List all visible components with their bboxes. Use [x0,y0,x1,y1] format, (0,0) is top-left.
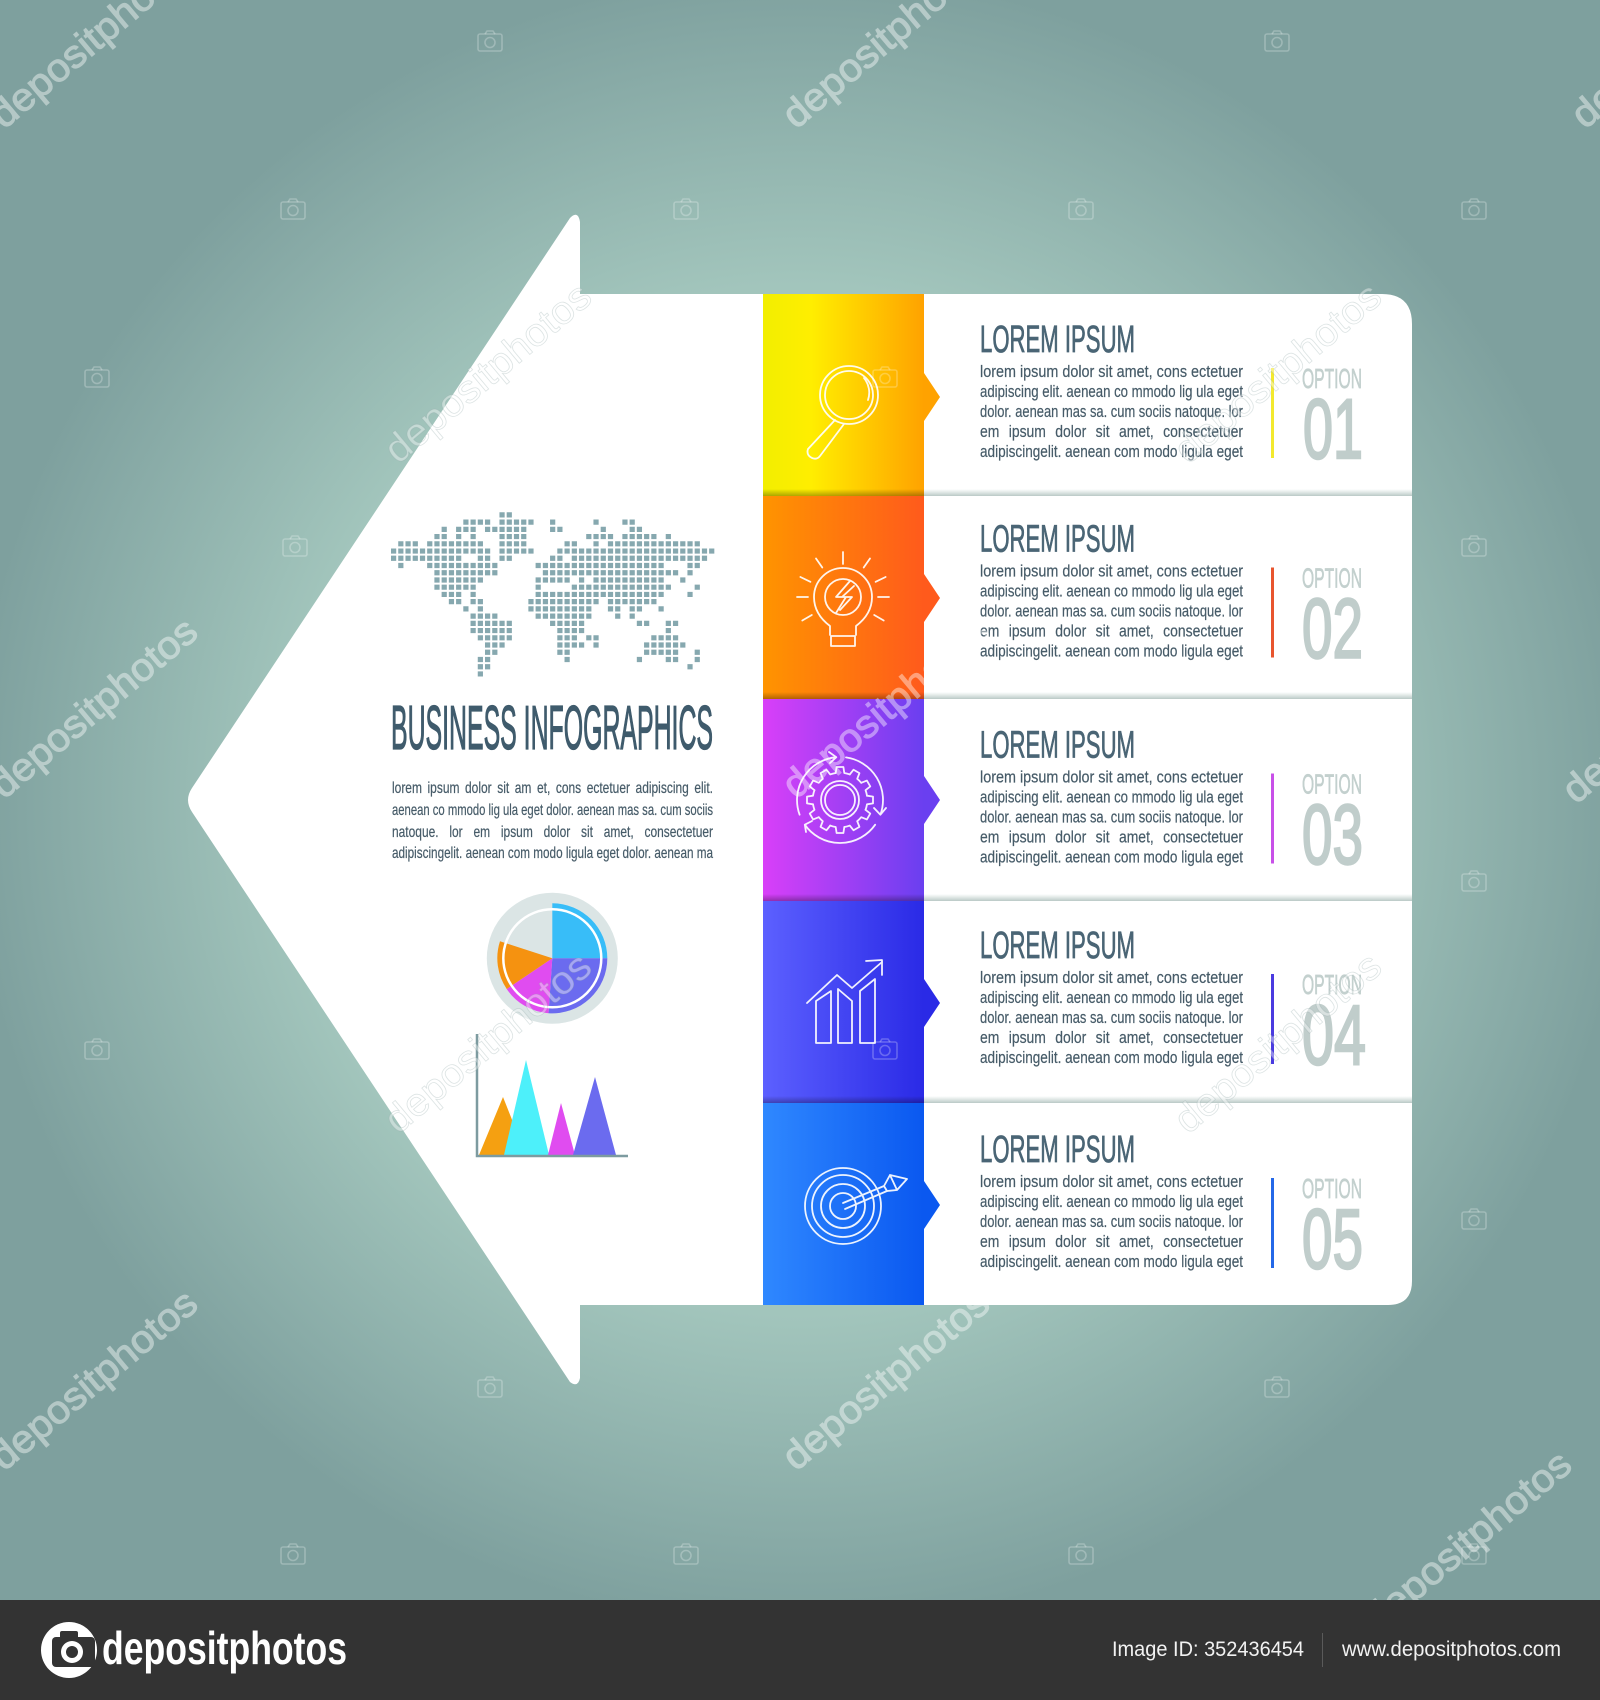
watermarks: depositphotos [376,944,600,1142]
watermarks: depositphotos [1166,944,1390,1142]
text 3: lorem ipsum dolor sit amet, cons ectetuer [980,768,1243,786]
pie chart [487,893,618,1024]
text 3: adipiscingelit. aenean com modo ligula eget [980,848,1243,866]
footer logo: depositphotos [102,1622,347,1674]
footer logo [41,1622,347,1678]
option label 4: OPTION [1302,969,1362,1000]
text 4: lorem ipsum dolor sit amet, cons ectetuer [980,969,1243,987]
option label 2: OPTION [1302,562,1362,594]
watermark camera marks [85,31,1486,1564]
watermarks: depositphotos [774,1281,998,1479]
heading 4: LOREM IPSUM [980,924,1135,966]
text 2: lorem ipsum dolor sit amet, cons ectetuer [980,562,1243,580]
intro paragraph: lorem ipsum dolor sit am et, cons ectetuer adipiscing elit. [392,780,713,797]
number 2: 02 [1302,582,1363,676]
white arrow panel [188,215,1412,1384]
number 5: 05 [1302,1192,1363,1286]
option label 5: OPTION [1302,1173,1362,1204]
accent line 5 [1271,1178,1274,1268]
text 3: em ipsum dolor sit amet, consectetuer [980,828,1243,846]
watermarks: depositphotos [774,609,998,807]
row dividers [924,489,1412,1103]
intro paragraph: aenean co mmodo lig ula eget dolor. aenean mas sa. cum sociis [392,802,713,819]
icon: light bulb [797,552,889,646]
heading 3: LOREM IPSUM [980,724,1135,766]
text 1 [980,363,1243,461]
text 1: dolor. aenean mas sa. cum sociis natoque. lor [980,403,1243,421]
number 4: 04 [1302,988,1366,1082]
text 4: dolor. aenean mas sa. cum sociis natoque. lor [980,1009,1243,1027]
text 2 [980,562,1243,660]
text 1: em ipsum dolor sit amet, consectetuer [980,423,1243,441]
area chart [477,1034,628,1156]
option 2 [980,518,1363,676]
option 1 [980,318,1363,476]
text 3 [980,768,1243,866]
option 5 [980,1128,1363,1286]
website url: www.depositphotos.com [1341,1638,1561,1661]
intro paragraph: natoque. lor em ipsum dolor sit amet, consectetuer [392,824,713,841]
text: BUSINESS INFOGRAPHICS [391,694,713,763]
text 5 [980,1173,1243,1271]
text 2: adipiscingelit. aenean com modo ligula eget [980,642,1243,660]
text 3: dolor. aenean mas sa. cum sociis natoque. lor [980,808,1243,826]
accent line 4 [1271,974,1274,1064]
text 5: em ipsum dolor sit amet, consectetuer [980,1233,1243,1251]
icon: rising bar chart [807,960,882,1043]
text 5: lorem ipsum dolor sit amet, cons ectetuer [980,1173,1243,1191]
accent line 2 [1271,568,1274,658]
band 4 indigo [763,901,940,1103]
text 4: adipiscingelit. aenean com modo ligula eget [980,1049,1243,1067]
text 3: adipiscing elit. aenean co mmodo lig ula eget [980,788,1243,806]
band 1 yellow [763,294,940,496]
text 1: adipiscing elit. aenean co mmodo lig ula eget [980,383,1243,401]
option 3 [980,724,1363,882]
text 2: dolor. aenean mas sa. cum sociis natoque. lor [980,602,1243,620]
icon: magnifier [808,366,878,459]
heading 2: LOREM IPSUM [980,518,1135,560]
option 4 [980,924,1366,1082]
intro paragraph [392,780,713,862]
text 1: lorem ipsum dolor sit amet, cons ectetuer [980,363,1243,381]
watermarks: depositphotos [1356,1442,1580,1640]
icon: target with arrow [805,1168,907,1244]
heading 5: LOREM IPSUM [980,1128,1135,1170]
band 5 blue [763,1103,940,1305]
heading 1: LOREM IPSUM [980,318,1135,360]
text 5: dolor. aenean mas sa. cum sociis natoque. lor [980,1213,1243,1231]
option label 3: OPTION [1302,768,1362,800]
intro paragraph: adipiscingelit. aenean com modo ligula eget dolor. aenean ma [392,845,713,862]
text 2: em ipsum dolor sit amet, consectetuer [980,622,1243,640]
icon: gear with arrows [797,752,886,843]
footer separator [1322,1633,1323,1667]
band 2 orange [763,496,940,699]
option label 1: OPTION [1302,363,1362,394]
accent line 3 [1271,774,1274,864]
image id: Image ID: 352436454 [1112,1638,1304,1661]
number 3: 03 [1302,788,1363,882]
watermarks: depositphotos [376,274,600,472]
text 4: em ipsum dolor sit amet, consectetuer [980,1029,1243,1047]
text 5: adipiscing elit. aenean co mmodo lig ula eget [980,1193,1243,1211]
band 3 purple [763,699,940,901]
text 5: adipiscingelit. aenean com modo ligula eget [980,1253,1243,1271]
text 4 [980,969,1243,1067]
accent line 1 [1271,368,1274,458]
text 2: adipiscing elit. aenean co mmodo lig ula eget [980,582,1243,600]
world map dotted [391,515,716,674]
watermarks: depositphotos [1166,274,1390,472]
text 4: adipiscing elit. aenean co mmodo lig ula eget [980,989,1243,1007]
footer bar [0,1600,1600,1700]
number 1: 01 [1303,382,1363,476]
text 1: adipiscingelit. aenean com modo ligula eget [980,443,1243,461]
